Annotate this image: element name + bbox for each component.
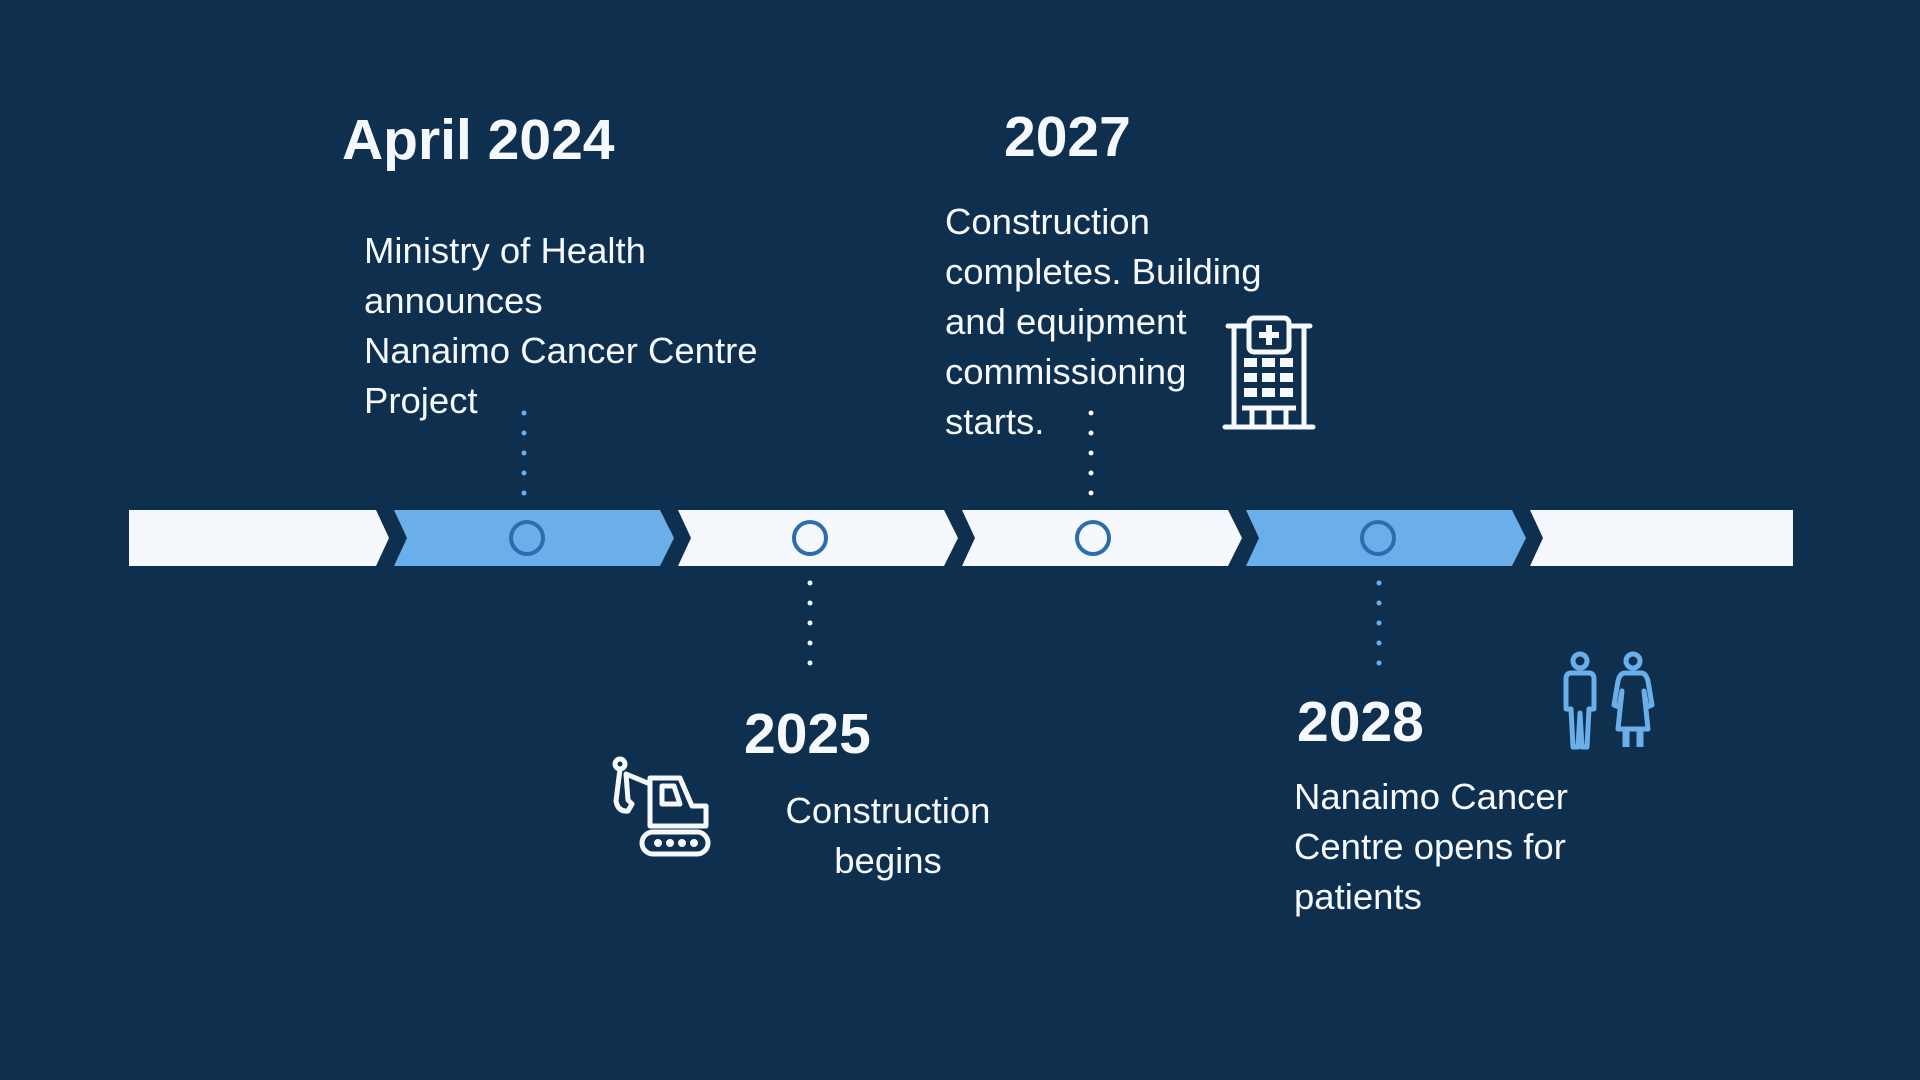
icon: people <box>1564 652 1654 750</box>
text: April 2024: Project <box>364 380 478 421</box>
text: 2028: patients <box>1294 876 1422 917</box>
text: 2025: begins <box>834 840 942 881</box>
text: 2027: starts. <box>945 401 1044 442</box>
text: 2027: commissioning <box>945 351 1186 392</box>
icon: hospital <box>1222 316 1316 430</box>
dotted connector: April 2024 <box>522 410 526 496</box>
text: April 2024: Nanaimo Cancer Centre <box>364 330 758 371</box>
text: 2028: Centre opens for <box>1294 826 1566 867</box>
icon: excavator <box>612 756 710 856</box>
dotted connector: 2025 <box>808 580 812 666</box>
text: 2025: Construction <box>786 790 990 831</box>
dotted connector: 2027 <box>1088 410 1094 496</box>
text: 2028 <box>1294 776 1568 917</box>
text: 2027: completes. Building <box>945 251 1262 292</box>
heading: April 2024: April 2024 <box>342 108 614 172</box>
text: 2025 <box>786 790 990 881</box>
text: April 2024: announces <box>364 280 543 321</box>
dotted connector: 2028 <box>1376 580 1382 666</box>
text: 2027 <box>945 201 1262 442</box>
heading: 2027: 2027 <box>1004 105 1131 169</box>
text: April 2024 <box>364 230 758 421</box>
text: April 2024: Ministry of Health <box>364 230 646 271</box>
text: 2028: Nanaimo Cancer <box>1294 776 1568 817</box>
text: 2027: and equipment <box>945 301 1186 342</box>
text: 2027: Construction <box>945 201 1150 242</box>
heading: 2025: 2025 <box>744 702 871 766</box>
heading: 2028: 2028 <box>1297 690 1424 754</box>
